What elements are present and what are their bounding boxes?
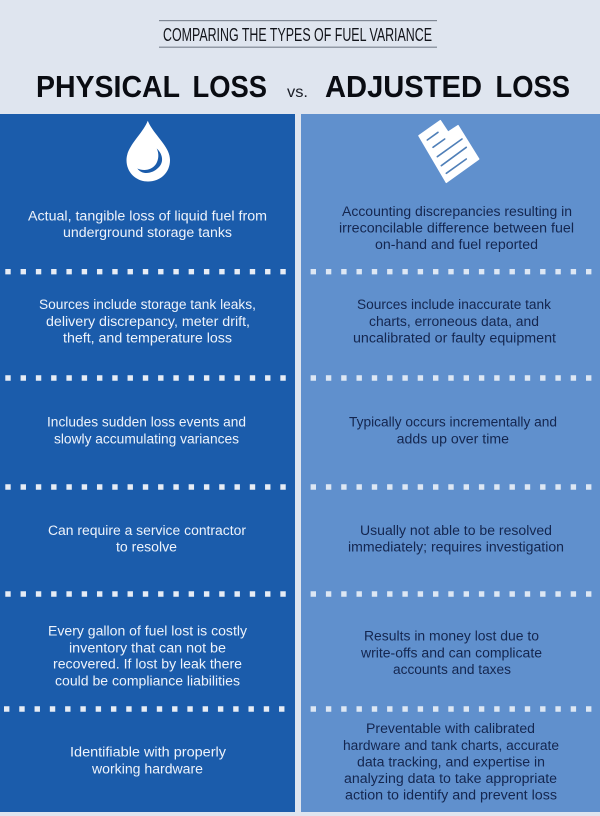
text: resolution: Usually not able to be resolved xyxy=(360,523,552,538)
text: definition: Accounting discrepancies resulting in xyxy=(342,204,572,219)
text: sources xyxy=(39,297,256,345)
text: sources: theft, and temperature loss xyxy=(63,330,232,345)
text: cost xyxy=(48,624,247,688)
text: definition: underground storage tanks xyxy=(63,225,232,240)
text: sources: charts, erroneous data, and xyxy=(369,314,539,329)
text: cost: Every gallon of fuel lost is costly xyxy=(48,624,247,639)
text: resolution: to resolve xyxy=(116,540,177,555)
title: COMPARING THE TYPES OF FUEL VARIANCE xyxy=(163,24,432,45)
heading: adjusted loss: LOSS xyxy=(496,70,570,104)
text: resolution xyxy=(48,523,247,555)
text: definition xyxy=(339,204,574,252)
text: prevention: action to identify and prevent loss xyxy=(345,787,557,802)
text: sources: uncalibrated or faulty equipment xyxy=(353,330,556,345)
text: identification xyxy=(70,745,226,776)
text: occurrence xyxy=(47,415,246,446)
text: resolution: Can require a service contractor xyxy=(48,523,247,538)
text: resolution xyxy=(348,523,564,555)
text: sources: Sources include storage tank leaks, xyxy=(39,297,256,312)
text: definition xyxy=(28,209,267,240)
text: definition: irreconcilable difference between fuel xyxy=(339,220,574,235)
dotted dividers xyxy=(311,272,595,709)
text: occurrence: Typically occurs incrementally and xyxy=(349,415,557,430)
text: prevention: hardware and tank charts, accurate xyxy=(343,738,559,753)
heading: adjusted loss xyxy=(325,70,570,104)
icon: document xyxy=(419,121,479,182)
text: prevention xyxy=(343,721,559,802)
text: cost: recovered. If lost by leak there xyxy=(53,657,242,672)
icon: water drop xyxy=(126,121,170,182)
text: sources: delivery discrepancy, meter drift, xyxy=(46,314,250,329)
text: prevention: analyzing data to take appropriate xyxy=(344,771,557,786)
heading: physical loss: LOSS xyxy=(192,70,267,104)
heading: vs.: vs. xyxy=(287,84,308,101)
text: cost: write-offs and can complicate xyxy=(360,645,542,660)
text: prevention: data tracking, and expertise in xyxy=(357,755,545,770)
panel: adjusted loss xyxy=(301,114,600,812)
text: identification: Identifiable with properly xyxy=(70,745,226,760)
text: occurrence: slowly accumulating variances xyxy=(54,431,239,446)
text: cost: could be compliance liabilities xyxy=(55,673,240,688)
text: cost: inventory that can not be xyxy=(69,640,226,655)
text: occurrence xyxy=(349,415,557,446)
text: prevention: Preventable with calibrated xyxy=(366,721,535,736)
dotted dividers xyxy=(4,272,290,709)
text: cost: accounts and taxes xyxy=(393,662,511,677)
text: occurrence: adds up over time xyxy=(397,431,509,446)
heading: adjusted loss: ADJUSTED xyxy=(325,70,482,104)
text: cost: Results in money lost due to xyxy=(364,629,539,644)
text: resolution: immediately; requires investigation xyxy=(348,540,564,555)
text: sources: Sources include inaccurate tank xyxy=(357,297,551,312)
text: sources xyxy=(353,297,556,345)
text: definition: Actual, tangible loss of liquid fuel from xyxy=(28,209,267,224)
heading: physical loss: PHYSICAL xyxy=(36,70,180,104)
text: identification: working hardware xyxy=(91,761,203,776)
text: occurrence: Includes sudden loss events and xyxy=(47,415,246,430)
panel: physical loss xyxy=(0,114,295,812)
heading: physical loss xyxy=(36,70,267,104)
text: definition: on-hand and fuel reported xyxy=(375,237,538,252)
text: cost xyxy=(360,629,542,677)
